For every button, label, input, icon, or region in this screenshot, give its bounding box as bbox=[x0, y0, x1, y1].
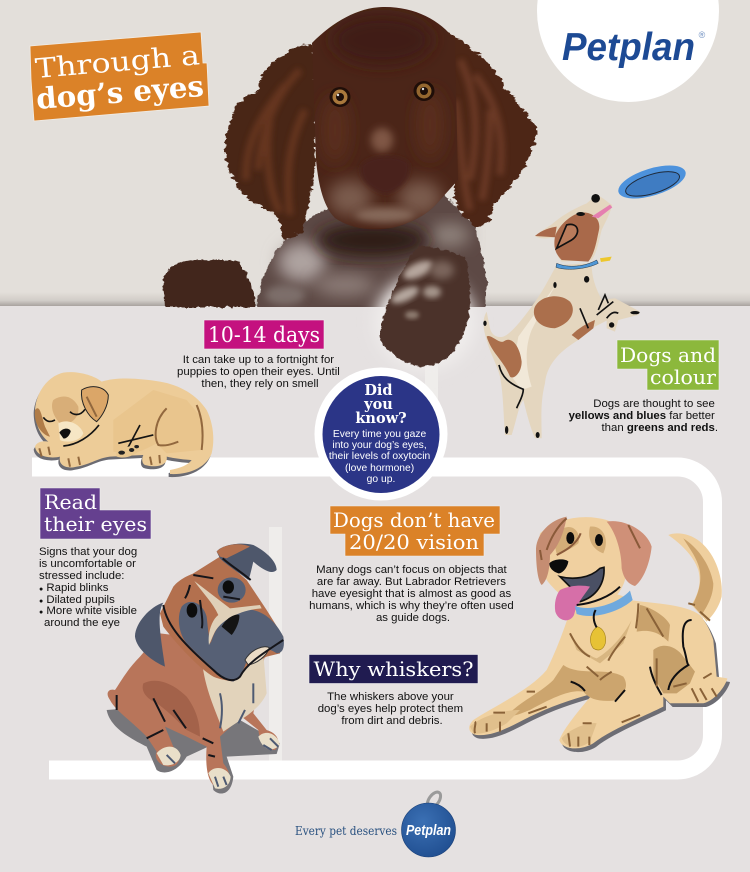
brown patches bbox=[534, 296, 573, 328]
text: read their eyes: around the eye bbox=[44, 617, 120, 629]
foreleg mottling bbox=[389, 257, 454, 319]
text: read their eyes: is uncomfortable or bbox=[39, 558, 136, 570]
did you know circle: you bbox=[363, 396, 393, 413]
mouth bbox=[560, 567, 604, 602]
spaniel left ear bbox=[225, 43, 317, 240]
heading: dogs don't have 20/20 vision: Dogs don’t have bbox=[333, 508, 495, 532]
shadow bbox=[34, 375, 212, 477]
labrador dog bbox=[469, 517, 730, 752]
logo circle bbox=[537, 0, 719, 102]
head bbox=[160, 557, 283, 682]
text: puppies: It can take up to a fortnight for bbox=[183, 354, 334, 366]
head bbox=[539, 517, 627, 608]
spaniel left paw bbox=[163, 260, 255, 307]
right ear strands bbox=[455, 60, 501, 210]
faint vertical bars bbox=[269, 363, 438, 762]
tag bbox=[590, 627, 606, 650]
body shading bbox=[143, 681, 200, 737]
text: 20/20 vision: humans, which is why they’re often used bbox=[309, 600, 514, 612]
body bbox=[108, 633, 278, 788]
did you know circle: know? bbox=[355, 410, 407, 427]
tongue bbox=[555, 586, 590, 620]
text: whiskers: dog’s eyes help protect them bbox=[318, 703, 463, 715]
collar bbox=[575, 591, 633, 616]
head bbox=[535, 195, 612, 262]
body bbox=[35, 372, 213, 474]
title: Through a bbox=[34, 40, 201, 85]
heading: dogs don't have 20/20 vision: 20/20 vision bbox=[349, 530, 479, 554]
did you know circle: go up. bbox=[367, 474, 395, 485]
jack russell jumping dog bbox=[483, 194, 640, 438]
text: puppies: then, they rely on smell bbox=[201, 378, 319, 390]
heading: dogs don't have 20/20 vision bbox=[330, 506, 500, 556]
text: read their eyes: Signs that your dog bbox=[39, 546, 137, 558]
shadow bbox=[107, 707, 280, 794]
white route line bbox=[32, 467, 712, 770]
left ear strands bbox=[246, 70, 305, 215]
heading: dogs and colour: Dogs and bbox=[620, 343, 716, 367]
body bbox=[484, 263, 640, 438]
eyes bbox=[566, 532, 574, 544]
tail bbox=[668, 533, 722, 622]
did you know circle bbox=[314, 368, 448, 500]
spaniel right ear bbox=[448, 33, 538, 228]
ears bbox=[217, 544, 277, 580]
text: dogs and colour: Dogs are thought to see bbox=[593, 398, 715, 410]
shadow bbox=[472, 596, 730, 752]
footer strapline: Every pet deserves bbox=[295, 824, 397, 838]
sleeping puppy bbox=[34, 372, 213, 477]
background bottom bbox=[0, 306, 750, 872]
collar bbox=[556, 260, 598, 269]
chest bbox=[203, 653, 267, 732]
line work bbox=[117, 558, 283, 757]
paws bbox=[157, 733, 280, 789]
line work bbox=[571, 587, 692, 702]
did you know circle: into your dog’s eyes, bbox=[332, 440, 427, 451]
did you know circle: Every time you gaze bbox=[333, 429, 426, 440]
darker patches bbox=[507, 665, 626, 717]
text: read their eyes: stressed include: bbox=[39, 570, 124, 582]
face lines bbox=[43, 409, 153, 450]
pads bbox=[116, 445, 142, 458]
text: 20/20 vision: are far away. But Labrador Retrievers bbox=[317, 576, 506, 588]
text: read their eyes: ● Rapid blinks bbox=[39, 582, 108, 594]
text: read their eyes: ● Dilated pupils bbox=[39, 594, 115, 606]
ears bbox=[536, 517, 567, 585]
did you know circle: (love hormone) bbox=[345, 463, 414, 474]
body bbox=[469, 592, 727, 748]
did you know circle: Did bbox=[364, 382, 393, 399]
background top bbox=[0, 0, 750, 306]
nose bbox=[549, 559, 568, 573]
title bbox=[30, 32, 209, 121]
ears bbox=[81, 387, 108, 422]
line work bbox=[499, 295, 618, 408]
title box bbox=[30, 32, 209, 121]
spaniel chest bbox=[257, 190, 487, 310]
text: whiskers: from dirt and debris. bbox=[341, 715, 443, 727]
eyes bbox=[223, 580, 234, 594]
spaniel head bbox=[312, 7, 458, 229]
nose bbox=[59, 429, 71, 438]
heading: dogs and colour: colour bbox=[650, 365, 716, 389]
paw glow bbox=[375, 274, 475, 370]
heading: dogs and colour bbox=[617, 340, 719, 390]
text: 20/20 vision: as guide dogs. bbox=[376, 612, 450, 624]
spaniel right foreleg bbox=[380, 247, 470, 367]
text: dogs and colour: yellows and blues far better bbox=[569, 410, 715, 422]
boxer dog bbox=[107, 544, 284, 794]
text: dogs and colour: than greens and reds. bbox=[601, 422, 718, 434]
mouth bbox=[245, 647, 269, 665]
nose bbox=[222, 615, 239, 635]
horizon shadow bbox=[0, 292, 750, 306]
text: 20/20 vision: Many dogs can’t focus on objects that bbox=[316, 564, 508, 576]
spaniel nose bbox=[361, 156, 410, 194]
spaniel photo bbox=[163, 7, 538, 370]
text: 20/20 vision: have eyesight that is almost as good as bbox=[312, 588, 511, 600]
text: read their eyes: ● More white visible bbox=[39, 605, 137, 617]
blaze bbox=[194, 581, 262, 645]
heading: read their eyes: their eyes bbox=[44, 512, 147, 536]
logo circle: Petplan bbox=[562, 26, 695, 69]
did you know circle: their levels of oxytocin bbox=[329, 451, 430, 462]
spaniel eyes bbox=[330, 81, 434, 107]
heading: why whiskers: Why whiskers? bbox=[314, 657, 474, 681]
heading: read their eyes bbox=[40, 488, 151, 539]
text: whiskers: The whiskers above your bbox=[327, 691, 454, 703]
footer pet tag bbox=[402, 790, 456, 857]
grey mask bbox=[179, 577, 284, 682]
title: dog’s eyes bbox=[35, 69, 205, 116]
text: puppies: puppies to open their eyes. Until bbox=[177, 366, 340, 378]
footer pet tag: Petplan bbox=[406, 823, 451, 839]
heading: 10-14 days: 10-14 days bbox=[208, 323, 320, 347]
frisbee bbox=[615, 159, 689, 205]
logo circle: ® bbox=[699, 30, 706, 40]
heading: read their eyes: Read bbox=[44, 490, 97, 514]
